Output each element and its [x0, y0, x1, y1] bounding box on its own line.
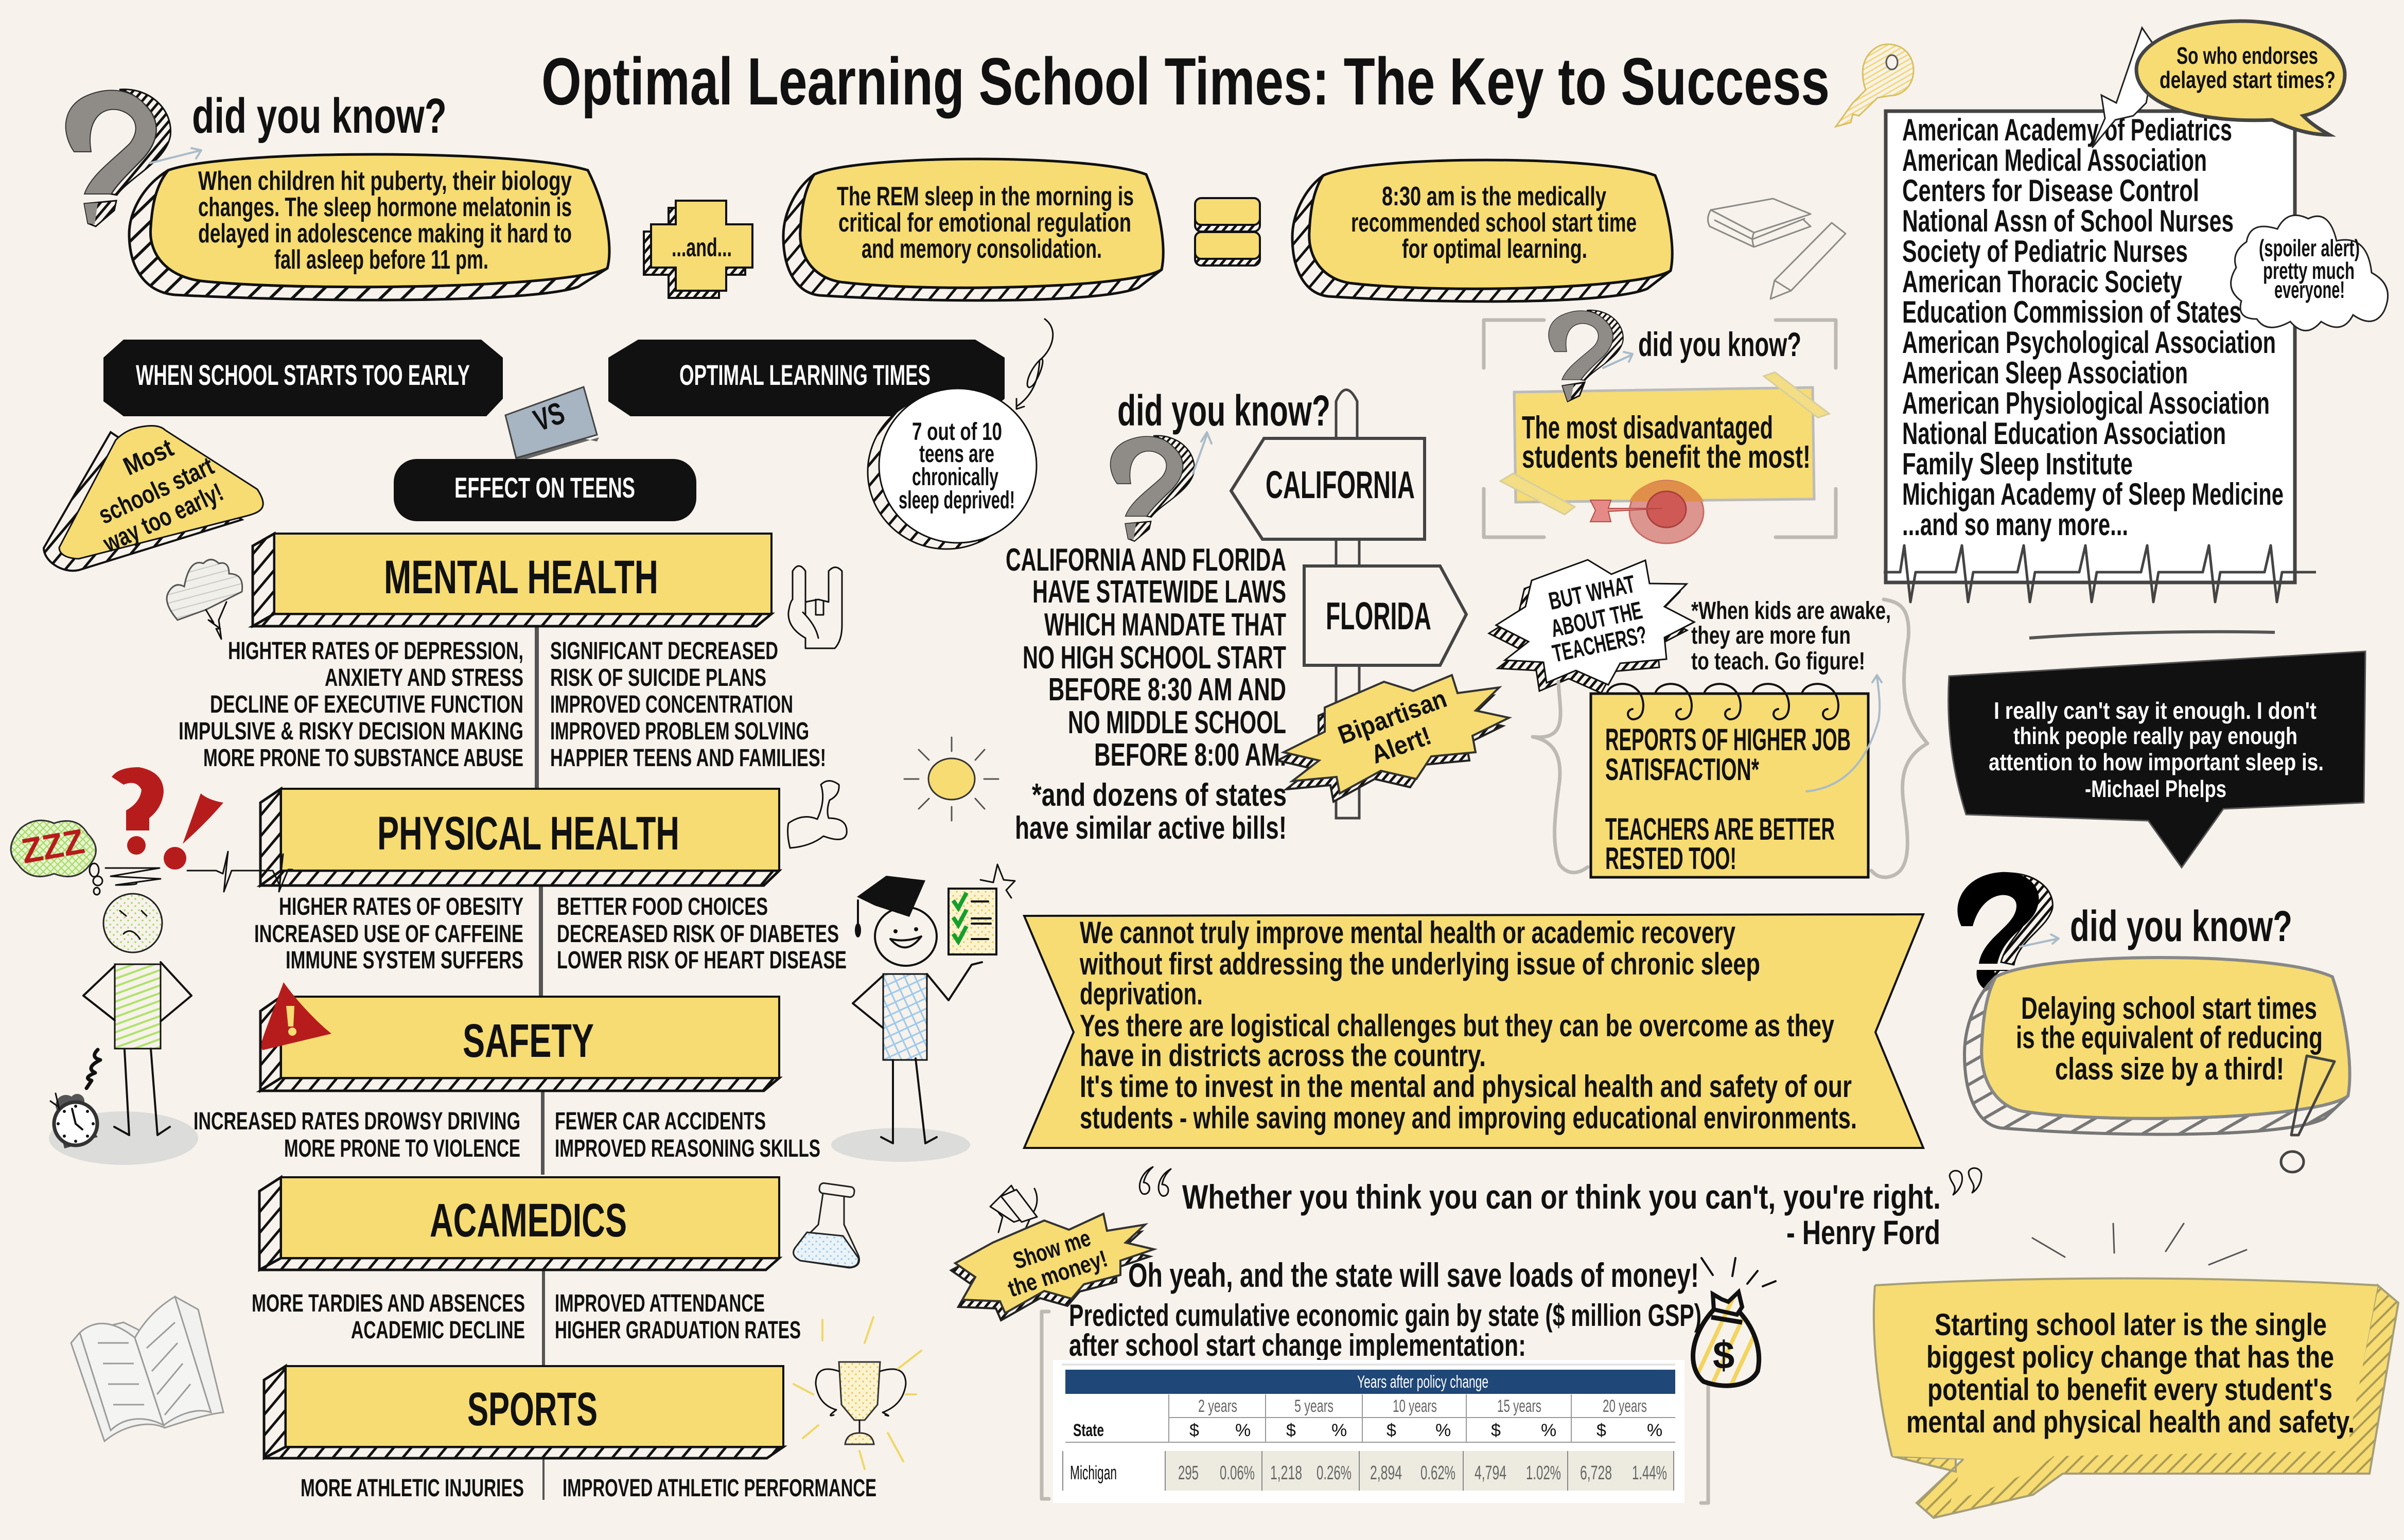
panel: call to action ribbon: Yes there are logistical challenges but they can be overcome as they	[1080, 1008, 1834, 1043]
panel: puberty fact bubble: delayed in adolescence making it hard to	[198, 219, 572, 249]
table: economic gain: 15 years	[1497, 1396, 1541, 1416]
text block: sports effect, optimal times: IMPROVED ATHLETIC PERFORMANCE	[563, 1475, 876, 1502]
callout: show me the money burst: the money!	[1005, 1245, 1111, 1302]
callout: what about the teachers burst: BUT WHAT	[1547, 571, 1638, 615]
panel: 8:30 am bubble: for optimal learning.	[1402, 234, 1587, 264]
arrow: to did you know 3	[1603, 352, 1633, 368]
table: economic gain: 0.26%	[1317, 1462, 1352, 1484]
table: economic gain: 0.06%	[1220, 1462, 1255, 1484]
panel: endorsers list: American Thoracic Society	[1902, 264, 2182, 299]
arrow: to first fact	[150, 148, 201, 163]
callout: spoiler alert cloud	[2231, 215, 2388, 330]
panel: disadvantaged students note	[1500, 370, 1835, 515]
panel: endorsers list: American Medical Association	[1902, 143, 2207, 178]
heading: when school starts too early	[103, 340, 503, 416]
panel: endorsers list: Education Commission of States	[1902, 295, 2241, 329]
panel: call to action ribbon: students - while saving money and improving educational environments.	[1080, 1101, 1857, 1135]
panel: mental health banner: MENTAL HEALTH	[384, 551, 658, 604]
text block: sports effect, early start: MORE ATHLETIC INJURIES	[301, 1475, 524, 1502]
text block: safety effects, optimal times	[555, 1108, 820, 1162]
icon: money bag	[1693, 1292, 1759, 1386]
table: economic gain: $	[1387, 1421, 1396, 1440]
table: economic gain: $	[1286, 1421, 1296, 1440]
text block: mental health effects, optimal times: IMPROVED PROBLEM SOLVING	[550, 718, 809, 745]
callout: spoiler alert cloud: pretty much	[2263, 257, 2355, 284]
table: economic gain: 1.44%	[1632, 1462, 1667, 1484]
rays above callout	[2032, 1224, 2247, 1265]
panel: endorsers list: National Education Association	[1902, 416, 2226, 451]
text block: state laws: NO MIDDLE SCHOOL	[1068, 705, 1286, 740]
panel: endorsers list	[1886, 111, 2295, 582]
text block: teachers footnote	[1691, 597, 1891, 675]
quote: Henry Ford: - Henry Ford	[1786, 1213, 1940, 1251]
panel: REM sleep bubble	[783, 159, 1163, 300]
callout: Michael Phelps quote: -Michael Phelps	[2085, 775, 2226, 802]
icon: VS tag	[505, 387, 599, 462]
text block: teachers footnote: to teach. Go figure!	[1691, 648, 1865, 675]
callout: Michael Phelps quote: attention to how important sleep is.	[1989, 749, 2324, 775]
text block: academics effects, optimal times	[555, 1290, 801, 1344]
text block: teachers footnote: they are more fun	[1691, 622, 1851, 649]
quote: Henry Ford	[1182, 1178, 1941, 1251]
panel: call to action ribbon	[1024, 914, 1923, 1148]
callout: schools start too early triangle: way too early!	[98, 477, 227, 558]
panel: delaying start bubble: class size by a third!	[2055, 1052, 2284, 1086]
heartbeat line	[1884, 545, 2316, 602]
panel: puberty fact bubble: fall asleep before 11 pm.	[274, 245, 488, 275]
icon: outlined exclamation	[2281, 1056, 2335, 1172]
panel: disadvantaged students note: The most disadvantaged	[1522, 410, 1773, 446]
table: economic gain: %	[1647, 1421, 1662, 1440]
panel: REM sleep bubble: The REM sleep in the morning is	[837, 182, 1134, 211]
icon: question mark 1	[66, 90, 171, 226]
icon: red question and exclamation	[112, 767, 223, 870]
text block: safety effects, optimal times: IMPROVED REASONING SKILLS	[555, 1135, 820, 1162]
panel: teachers notepad: REPORTS OF HIGHER JOB	[1605, 722, 1851, 757]
callout: show me the money burst: Show me	[1010, 1224, 1094, 1275]
icon: signpost: CALIFORNIA	[1266, 463, 1415, 506]
text block: mental health effects, early start: MORE PRONE TO SUBSTANCE ABUSE	[203, 745, 523, 772]
text block: economic gain caption	[1069, 1298, 1701, 1362]
frame: table brackets	[1042, 1312, 1708, 1503]
text block: safety effects, early start: MORE PRONE TO VIOLENCE	[284, 1135, 520, 1162]
text block: safety effects, early start	[194, 1108, 520, 1162]
panel: sports banner: SPORTS	[467, 1383, 598, 1436]
text block: physical health effects, early start: HIGHER RATES OF OBESITY	[279, 893, 523, 921]
text block: academics effects, early start	[252, 1290, 525, 1344]
panel: call to action ribbon: without first addressing the underlying issue of chronic sleep	[1079, 947, 1760, 981]
table: economic gain: 4,794	[1475, 1462, 1506, 1484]
icon: plus with and	[644, 201, 752, 298]
panel: REM sleep bubble: and memory consolidation.	[862, 234, 1102, 264]
panel: teachers notepad: SATISFACTION*	[1605, 752, 1759, 787]
icon: book and pencil	[1708, 199, 1846, 299]
text block: mental health effects, early start	[179, 638, 523, 772]
text block: state laws: BEFORE 8:30 AM AND	[1048, 672, 1286, 707]
callout: bipartisan alert burst: Bipartisan	[1334, 684, 1450, 750]
table: economic gain: %	[1541, 1421, 1556, 1440]
panel: endorsers list: American Sleep Association	[1902, 356, 2188, 390]
figure: tired person	[49, 894, 198, 1165]
table: economic gain: 10 years	[1393, 1396, 1437, 1416]
panel: endorsers list: American Academy of Pediatrics	[1902, 113, 2232, 147]
text block: state laws: HAVE STATEWIDE LAWS	[1032, 574, 1286, 610]
icon: rock hand	[788, 566, 842, 648]
arrow: curl to circle	[1016, 319, 1053, 409]
callout: sleep deprived circle: chronically	[912, 464, 998, 491]
icon: open book	[71, 1297, 223, 1441]
panel: endorsers list: Society of Pediatric Nurses	[1902, 234, 2188, 269]
icon: thought bubbles and scribble	[90, 863, 161, 895]
heading: optimal learning times	[608, 340, 1005, 416]
callout: spoiler alert cloud: everyone!	[2274, 276, 2345, 303]
icon: sun	[904, 737, 998, 821]
icon: alarm clock	[50, 1050, 100, 1148]
text block: state laws: *and dozens of states	[1032, 777, 1287, 813]
frame: disadvantaged students brackets	[1484, 320, 1836, 537]
text block: state will save money: Oh yeah, and the state will save loads of money!	[1128, 1256, 1699, 1294]
heading: effect on teens	[394, 459, 696, 521]
callout: who endorses speech bubble: delayed start times?	[2160, 66, 2336, 93]
panel: teachers notepad: TEACHERS ARE BETTER	[1605, 812, 1835, 846]
icon: storm cloud	[167, 560, 242, 639]
icon: signpost: FLORIDA	[1326, 594, 1431, 638]
heading: did you know 3: did you know?	[1638, 325, 1801, 363]
icon: white arrow to list	[2092, 28, 2156, 148]
text block: state laws: NO HIGH SCHOOL START	[1023, 640, 1286, 676]
heading: did you know 1: did you know?	[192, 88, 447, 144]
icon: plus with and: ...and...	[672, 233, 732, 262]
text block: mental health effects, early start: HIGHTER RATES OF DEPRESSION,	[228, 638, 523, 665]
text block: physical health effects, optimal times: DECREASED RISK OF DIABETES	[557, 921, 839, 948]
callout: sleep deprived circle	[868, 388, 1037, 549]
text block: state laws: BEFORE 8:00 AM.	[1094, 737, 1286, 773]
icon: key	[1836, 44, 1914, 127]
callout: what about the teachers burst	[1489, 560, 1694, 693]
table: economic gain: 2,894	[1370, 1462, 1402, 1484]
icon: flexed arm	[788, 781, 847, 848]
heading: did you know 2: did you know?	[1117, 386, 1330, 435]
callout: sleep deprived circle: sleep deprived!	[899, 487, 1015, 514]
panel: physical health banner: PHYSICAL HEALTH	[377, 807, 679, 860]
panel: puberty fact bubble: changes. The sleep hormone melatonin is	[198, 192, 572, 222]
text block: academics effects, early start: MORE TARDIES AND ABSENCES	[252, 1290, 525, 1317]
text block: physical health effects, optimal times: BETTER FOOD CHOICES	[557, 893, 768, 921]
table: economic gain: 1,218	[1270, 1462, 1302, 1484]
text block: state laws: WHICH MANDATE THAT	[1044, 607, 1286, 643]
panel: academics banner	[259, 1177, 779, 1270]
callout: Michael Phelps quote: I really can't say it enough. I don't	[1994, 697, 2317, 724]
panel: 8:30 am bubble: 8:30 am is the medically	[1382, 182, 1606, 211]
table: economic gain: 2 years	[1198, 1396, 1237, 1416]
callout: schools start too early triangle: schools start	[94, 451, 218, 529]
text block: mental health effects, optimal times: HAPPIER TEENS AND FAMILIES!	[550, 745, 826, 772]
text block: physical health effects, early start: IMMUNE SYSTEM SUFFERS	[286, 947, 523, 974]
text block: economic gain caption: after school start change implementation:	[1069, 1328, 1526, 1362]
text block: academics effects, optimal times: IMPROVED ATTENDANCE	[555, 1290, 765, 1317]
table: economic gain: %	[1331, 1421, 1347, 1440]
text block: safety effects, early start: INCREASED RATES DROWSY DRIVING	[194, 1108, 520, 1135]
panel: REM sleep bubble: critical for emotional regulation	[838, 208, 1131, 238]
panel: call to action ribbon: have in districts across the country.	[1080, 1038, 1486, 1073]
table: economic gain	[1053, 1360, 1684, 1503]
panel: mental health banner	[253, 534, 771, 626]
callout: what about the teachers burst: TEACHERS?	[1550, 621, 1650, 668]
callout: schools start too early triangle: Most	[119, 433, 178, 481]
heading: effect on teens: EFFECT ON TEENS	[454, 471, 635, 504]
text block: mental health effects, optimal times: IMPROVED CONCENTRATION	[550, 691, 793, 718]
panel: teachers notepad	[1591, 684, 1868, 877]
table: economic gain: %	[1235, 1421, 1251, 1440]
table: economic gain: $	[1491, 1421, 1501, 1440]
panel: endorsers list: National Assn of School Nurses	[1902, 204, 2234, 238]
icon: opening quote marks	[1139, 1167, 1171, 1196]
arrow: to did you know 2	[1193, 432, 1212, 473]
curly brace left	[1533, 682, 1588, 873]
panel: puberty fact bubble: When children hit puberty, their biology	[198, 166, 572, 196]
text block: physical health effects, early start: INCREASED USE OF CAFFEINE	[254, 921, 523, 948]
text block: mental health effects, early start: ANXIETY AND STRESS	[325, 664, 523, 692]
heading: when school starts too early: WHEN SCHOOL STARTS TOO EARLY	[136, 359, 470, 391]
table: economic gain: Michigan	[1070, 1462, 1117, 1484]
panel: puberty fact bubble	[129, 154, 609, 300]
quote: Henry Ford: Whether you think you can or think you can't, you're right.	[1182, 1178, 1941, 1216]
panel: call to action ribbon: deprivation.	[1080, 977, 1203, 1011]
icon: hand with money	[990, 1185, 1037, 1237]
panel: call to action ribbon: We cannot truly improve mental health or academic recovery	[1080, 915, 1735, 950]
callout: what about the teachers burst: ABOUT THE	[1549, 597, 1645, 643]
icon: trophy	[794, 1317, 921, 1469]
icon: equals sign	[1195, 198, 1260, 265]
text block: teachers footnote: *When kids are awake,	[1691, 597, 1891, 625]
table: economic gain: 20 years	[1603, 1396, 1647, 1416]
callout: show me the money burst	[951, 1214, 1154, 1320]
heartbeat: drowsy pulse	[187, 852, 292, 892]
icon: money bag: $	[1713, 1334, 1734, 1377]
text block: state laws: have similar active bills!	[1015, 810, 1287, 846]
panel: endorsers list: ...and so many more...	[1902, 507, 2128, 542]
table: economic gain: Years after policy change	[1357, 1372, 1488, 1392]
callout: sleep deprived circle: 7 out of 10	[912, 418, 1002, 446]
text block: state laws	[1006, 542, 1287, 846]
panel: safety banner: SAFETY	[463, 1015, 594, 1067]
callout: bipartisan alert burst	[1277, 675, 1509, 802]
icon: zzz cloud: ZZZ	[19, 822, 87, 871]
icon: question mark 3	[1549, 310, 1623, 380]
table: economic gain: $	[1189, 1421, 1199, 1440]
table: economic gain: 0.62%	[1420, 1462, 1455, 1484]
arrow: footnote to notepad	[1806, 675, 1882, 791]
callout: sleep deprived circle: teens are	[919, 440, 994, 468]
text block: mental health effects, early start: DECLINE OF EXECUTIVE FUNCTION	[210, 691, 523, 718]
panel: delaying start bubble	[1964, 958, 2349, 1135]
title: Optimal Learning School Times: The Key to Success	[541, 44, 1830, 119]
text block: academics effects, early start: ACADEMIC DECLINE	[351, 1317, 525, 1344]
panel: disadvantaged students note: students benefit the most!	[1522, 439, 1811, 475]
heading: did you know 4: did you know?	[2070, 902, 2292, 950]
callout: schools start too early triangle	[44, 426, 263, 571]
icon: closing quote marks	[1950, 1168, 1981, 1195]
arrow: to did you know 4	[2020, 934, 2059, 947]
text block: mental health effects, early start: IMPULSIVE & RISKY DECISION MAKING	[179, 718, 523, 745]
text block: physical health effects, early start	[254, 893, 523, 974]
icon: target with dart	[1590, 481, 1704, 543]
text block: physical health effects, optimal times	[557, 893, 847, 974]
text block: mental health effects, optimal times	[550, 638, 826, 772]
text block: mental health effects, optimal times: RISK OF SUICIDE PLANS	[550, 664, 766, 692]
panel: 8:30 am bubble: recommended school start time	[1351, 208, 1637, 238]
callout: bipartisan alert burst: Alert!	[1367, 721, 1435, 769]
panel: 8:30 am bubble	[1292, 160, 1672, 302]
panel: endorsers list: Family Sleep Institute	[1902, 447, 2133, 481]
text block: mental health effects, optimal times: SIGNIFICANT DECREASED	[550, 638, 778, 665]
text block: physical health effects, optimal times: LOWER RISK OF HEART DISEASE	[557, 947, 847, 974]
figure: happy graduate	[831, 864, 1015, 1162]
divider line above quote	[2029, 632, 2275, 638]
text block: economic gain caption: Predicted cumulative economic gain by state ($ million GSP)	[1069, 1298, 1701, 1333]
table: economic gain: 5 years	[1294, 1396, 1333, 1416]
rays around money bag	[1701, 1258, 1776, 1286]
callout: who endorses speech bubble	[2136, 21, 2345, 135]
callout: Michael Phelps quote: think people really pay enough	[2013, 722, 2297, 749]
panel: call to action ribbon: It's time to invest in the mental and physical health and safety of our	[1080, 1069, 1852, 1104]
callout: Michael Phelps quote	[1949, 651, 2365, 868]
callout: biggest policy change	[1874, 1278, 2398, 1518]
icon: black question mark	[1957, 872, 2052, 991]
table: economic gain: %	[1435, 1421, 1451, 1440]
text block: academics effects, optimal times: HIGHER GRADUATION RATES	[555, 1317, 801, 1344]
icon: question mark 2	[1111, 436, 1195, 541]
panel: teachers notepad: RESTED TOO!	[1605, 841, 1736, 876]
center divider line	[535, 614, 545, 1500]
icon: VS tag: VS	[529, 395, 569, 438]
panel: endorsers list: Centers for Disease Control	[1902, 173, 2199, 208]
callout: who endorses speech bubble: So who endorses	[2177, 42, 2318, 69]
icon: flask	[794, 1182, 859, 1268]
curly brace right	[1871, 599, 1927, 877]
table: economic gain: 1.02%	[1526, 1462, 1561, 1484]
text block: safety effects, optimal times: FEWER CAR ACCIDENTS	[555, 1108, 766, 1135]
icon: signpost	[1231, 390, 1466, 818]
table: economic gain: 295	[1178, 1462, 1199, 1484]
panel: physical health banner	[260, 789, 779, 886]
panel: sports banner	[264, 1366, 783, 1458]
heading: optimal learning times: OPTIMAL LEARNING TIMES	[679, 359, 931, 391]
table: economic gain: State	[1073, 1421, 1104, 1440]
table: economic gain: $	[1596, 1421, 1606, 1440]
panel: academics banner: ACAMEDICS	[430, 1194, 627, 1247]
table: economic gain: 6,728	[1580, 1462, 1612, 1484]
icon: warning triangle	[261, 982, 331, 1050]
panel: safety banner	[260, 997, 779, 1091]
text block: state laws: CALIFORNIA AND FLORIDA	[1006, 542, 1286, 578]
